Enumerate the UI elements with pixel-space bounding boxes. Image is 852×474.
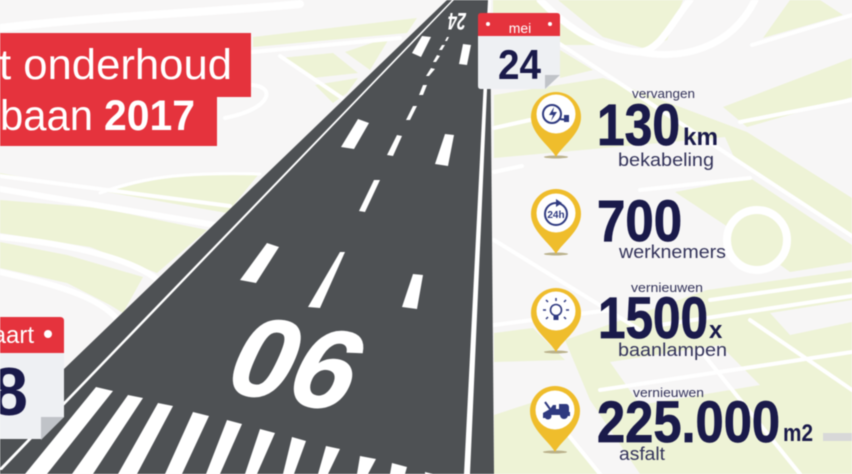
label below: asfalt [619,444,665,464]
smudge mark [823,433,852,441]
left side dashes [240,36,431,283]
banner text: 2017 [104,92,195,140]
page fold [41,417,64,440]
banner text: baan [0,92,93,140]
calendar: 8 maart [0,317,64,440]
value: 1500 [598,286,708,351]
runway number 24: 24 [448,7,467,34]
calendar header [478,13,560,36]
unit: km [683,124,718,151]
right side dashes [402,44,471,309]
runway [0,0,494,474]
unit: x [709,317,723,344]
header holes [486,22,552,26]
label below: werknemers [618,242,726,262]
banner background [0,33,251,146]
stat: 225.000 m2 asphalt [530,385,852,464]
label above: vernieuwen [631,280,703,295]
center line dashes [308,37,449,308]
value: 700 [597,189,682,254]
runway edge lines [0,0,491,474]
unit: m2 [783,420,813,447]
label above: vervangen [632,86,695,101]
runway number 06: 06 [208,294,386,435]
page fold [545,75,560,89]
pin icon: 24h [531,189,581,256]
calendar header [0,317,64,353]
value: 225.000 [597,390,780,455]
stat: 130 km cabling [531,86,718,170]
label below: bekabeling [618,150,714,170]
calendar page [478,36,560,89]
pin icon: lamp [531,288,581,354]
pin icon: cable [531,92,581,158]
month label: mei [509,20,531,36]
calendar page [0,350,64,439]
title banner [0,33,251,146]
pin icon: road roller [530,386,580,454]
day number: 24 [498,40,542,88]
label above: vernieuwen [633,385,704,400]
header hole [44,330,52,338]
pin icon: 24h: 24h [547,210,565,221]
label below: baanlampen [618,340,727,360]
stat: 700 workers [531,189,726,262]
threshold stripes [25,387,433,474]
runway surface [0,0,494,474]
stat: 1500x runway lights [531,280,727,360]
calendar: 24 mei [478,13,560,89]
banner text: t onderhoud [0,41,232,89]
value: 130 [597,93,680,158]
